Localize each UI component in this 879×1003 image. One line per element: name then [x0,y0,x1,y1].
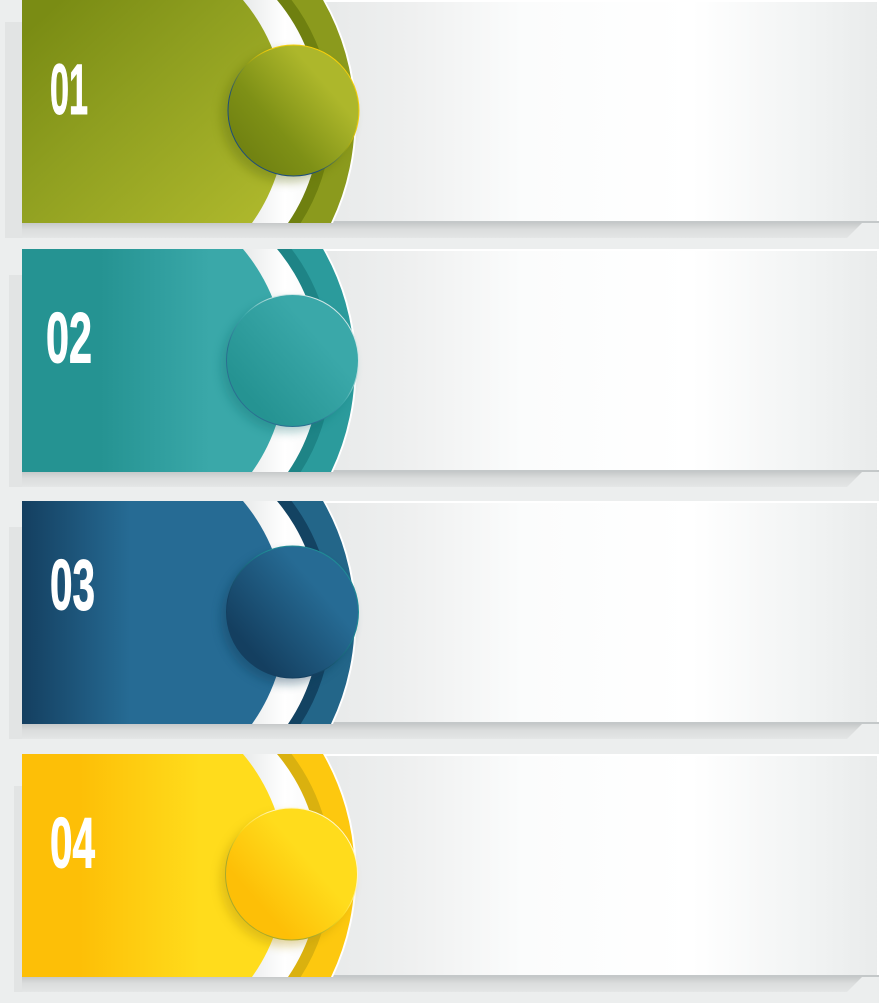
white stripe 04 [243,754,320,977]
drop shadow 02 [9,275,862,487]
white rim 03 [243,501,357,724]
content card 04 [22,754,879,977]
disc shadow 04 [220,814,352,946]
disc 03 [226,546,358,678]
drop shadow 04 [14,786,862,992]
white stripe 01 [243,0,320,223]
white rim 02 [243,249,357,472]
disc 02 [226,294,358,426]
number 04: 04 [50,804,95,884]
band inner shade 02 [277,249,324,472]
disc shadow 02 [221,300,353,432]
white rim 04 [243,754,357,977]
disc 01 [228,45,359,176]
disc 04 [226,808,358,940]
panel: banner 01 [5,0,879,238]
disc shadow 01 [221,50,353,182]
colour block 04 [22,754,286,977]
disc shadow 03 [221,552,353,684]
band inner shade 04 [277,754,323,977]
band inner shade 03 [277,501,324,724]
number 03: 03 [50,546,95,626]
panel: banner 01: 01 [50,50,88,130]
curved band 02 [277,249,355,472]
content card 01 [22,0,879,223]
panel: banner 02 [9,241,879,487]
panel: banner 03 [9,493,879,739]
white stripe 02 [243,249,320,472]
curved band 03 [277,501,355,724]
white stripe 03 [243,501,320,724]
colour block 01 [22,0,286,223]
white rim 01 [243,0,357,223]
content card 03 [22,501,879,724]
colour block 03 [22,501,286,724]
drop shadow 01 [5,22,862,238]
band inner shade 01 [273,0,323,231]
panel: banner 04 [14,746,879,992]
content card 02 [22,249,879,472]
curved band 04 [277,754,355,977]
number 02: 02 [46,298,92,378]
curved band 01 [277,0,355,223]
drop shadow 03 [9,527,862,739]
colour block 02 [22,249,286,472]
